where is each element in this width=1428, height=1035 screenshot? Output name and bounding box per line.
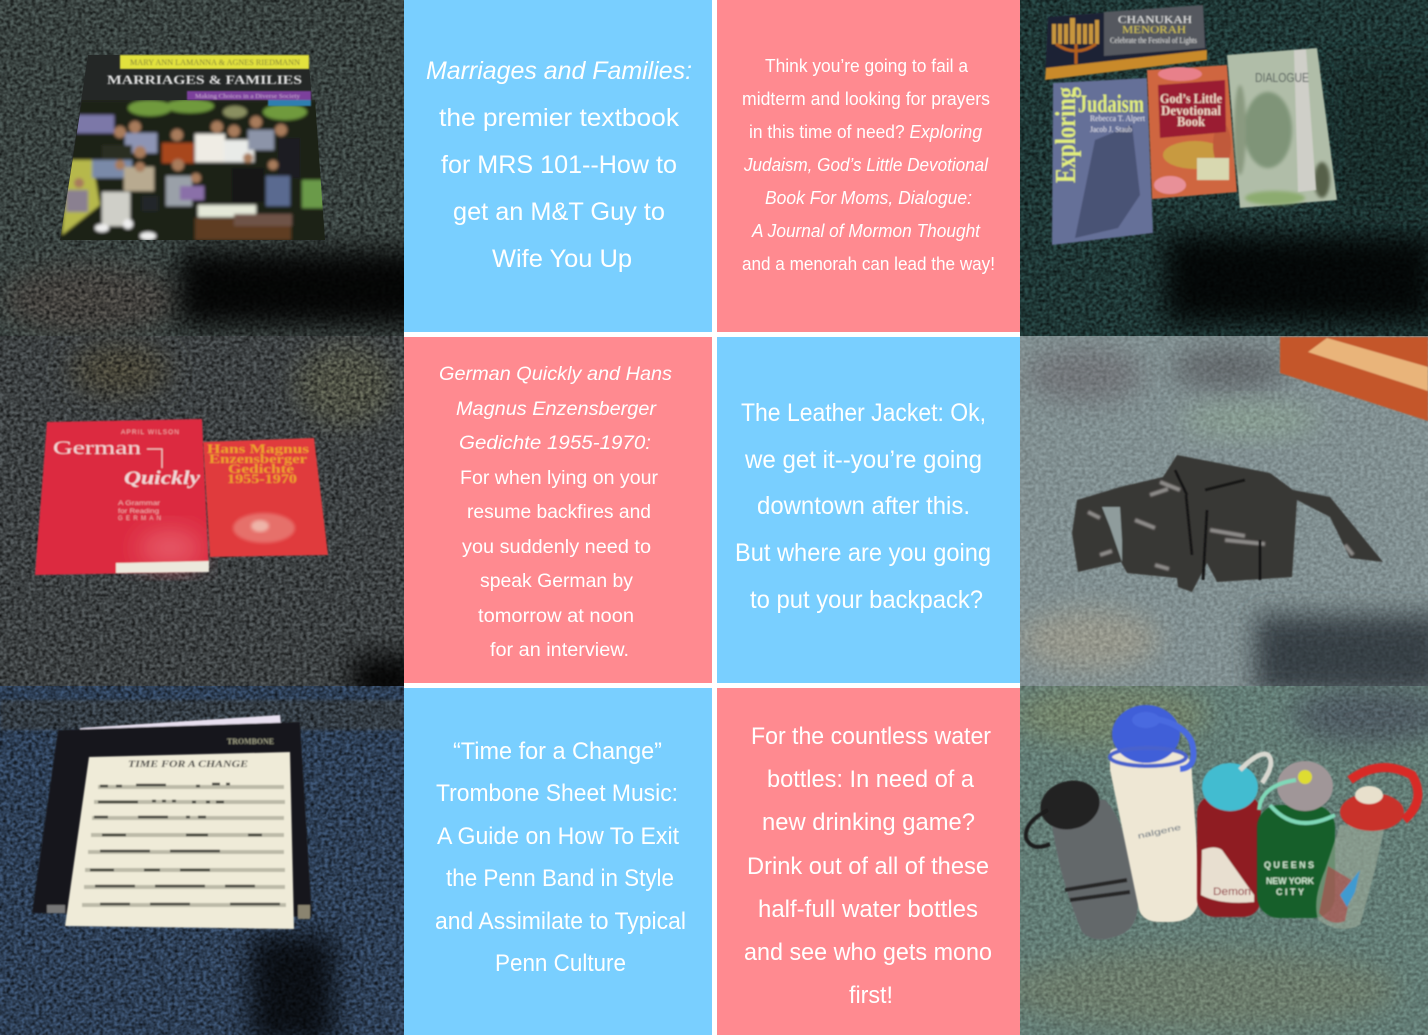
panel: water bottles text: For the countless water (751, 723, 991, 750)
green bottle: QUEENS (1264, 860, 1314, 870)
panel: prayers text: midterm and looking for prayers (742, 89, 990, 109)
sheet music page (65, 752, 294, 929)
panel: German books text: Magnus Enzensberger (456, 399, 657, 420)
panel: water bottles text: bottles: In need of a (767, 766, 975, 793)
purple subtitle strip: Making Choices in a Diverse Society (195, 93, 301, 100)
panel: water bottles text (717, 688, 1020, 1035)
panel: German books text: German Quickly and Hans (439, 364, 673, 385)
German Quickly book: German (53, 438, 142, 459)
wooden platform (1280, 337, 1428, 421)
panel: trombone music text: the Penn Band in Style (446, 865, 674, 892)
panel: trombone music text (404, 688, 712, 1035)
textbook cover (60, 55, 330, 245)
menorah box: CHANUKAH (1118, 14, 1192, 26)
panel: water bottles text: first! (849, 982, 893, 1009)
panel: German books text: Gedichte 1955-1970: (459, 433, 651, 454)
God's Little Devotional Book: Devotional (1161, 104, 1221, 119)
panel: water bottles text: and see who gets mono (744, 939, 992, 966)
panel: prayers text: Think you’re going to fail a (765, 56, 969, 76)
panel: trombone music text: A Guide on How To Exit (437, 823, 679, 850)
leather jacket (1072, 455, 1383, 592)
panel: trombone music text: and Assimilate to Typical (435, 908, 686, 935)
panel: leather jacket text: downtown after this. (757, 492, 970, 520)
Enzensberger Gedichte book: Hans Magnus (207, 441, 309, 456)
green bottle: NEW YORK (1266, 876, 1314, 886)
panel: Marriages and Families text: for MRS 101--How to (441, 151, 677, 179)
purple subtitle strip (187, 91, 311, 106)
yellow author strip (120, 55, 309, 69)
panel: Marriages and Families text: get an M&T Guy to (453, 198, 665, 226)
German Quickly book: GERMAN (118, 516, 161, 522)
panel: trombone music text: Penn Culture (495, 950, 626, 977)
menorah box: MENORAH (1122, 24, 1186, 36)
panel: Marriages and Families text: Wife You Up (492, 245, 632, 273)
panel: prayers text: Book For Moms, Dialogue: (765, 188, 972, 208)
Enzensberger Gedichte book (203, 438, 328, 557)
Exploring Judaism book (1051, 78, 1153, 245)
panel: German books text: For when lying on your (460, 468, 659, 489)
panel: water bottles text: Drink out of all of these (747, 853, 989, 880)
Enzensberger Gedichte book: Enzensberger (209, 451, 307, 466)
Enzensberger Gedichte book: 1955-1970 (227, 471, 297, 486)
menorah box (1045, 5, 1207, 80)
photo: religious books and menorah on carpet (1020, 0, 1428, 336)
Enzensberger Gedichte book: Gedichte (228, 461, 294, 476)
Exploring Judaism book: Rebecca T. Alpert (1090, 114, 1146, 123)
photo: leather jacket on carpet (1020, 336, 1428, 695)
panel: prayers text: Judaism, God’s Little Devotional (743, 155, 989, 175)
panel: German books text: speak German by (480, 571, 634, 592)
black binder (32, 715, 312, 919)
panel: water bottles text: half-full water bottles (758, 896, 978, 923)
God's Little Devotional Book: God’s Little (1160, 92, 1222, 107)
German Quickly book: Quickly (124, 468, 201, 489)
Exploring Judaism book: Exploring (1051, 87, 1082, 183)
Exploring Judaism book: Jacob J. Staub (1090, 125, 1132, 134)
sheet music page: TIME FOR A CHANGE (128, 760, 248, 770)
photo: water bottles on carpet (1000, 685, 1428, 1035)
panel: prayers text: in this time of need? Exploring (749, 122, 982, 142)
panel: German books text: tomorrow at noon (478, 606, 634, 627)
panel: trombone music text: “Time for a Change” (453, 738, 662, 765)
panel: leather jacket text: we get it--you’re going (744, 446, 982, 474)
green bottle: CITY (1276, 887, 1304, 897)
German Quickly book: A Grammar (118, 501, 160, 507)
panel: trombone music text: Trombone Sheet Music: (436, 780, 678, 807)
photo: trombone sheet music on carpet (0, 686, 404, 1035)
photo: Marriages and Families textbook on carpet (0, 0, 448, 336)
white Nalgene bottle: nalgene (1137, 823, 1183, 841)
panel: leather jacket text: But where are you going (735, 539, 991, 567)
photo: German books on carpet (0, 336, 422, 705)
white Nalgene bottle (1110, 705, 1200, 922)
panel: water bottles text: new drinking game? (762, 809, 975, 836)
God's Little Devotional Book: Book (1177, 115, 1205, 130)
panel: leather jacket text: The Leather Jacket: Ok, (741, 399, 986, 427)
German Quickly book: APRIL WILSON (121, 429, 179, 436)
Dialogue journal (1227, 48, 1337, 208)
panel: leather jacket text: to put your backpack? (750, 586, 983, 614)
panel: prayers text (717, 0, 1020, 332)
clear bottle with red cap (1316, 768, 1418, 929)
panel: Marriages and Families text (404, 0, 712, 332)
panel: Marriages and Families text: Marriages and Families: (426, 57, 692, 85)
Dialogue journal: DIALOGUE (1255, 70, 1309, 85)
red bottle (1197, 754, 1271, 917)
panel: prayers text: A Journal of Mormon Thought (751, 221, 981, 241)
panel: German books text (404, 337, 712, 683)
God's Little Devotional Book (1147, 65, 1237, 199)
panel: German books text: you suddenly need to (462, 537, 651, 558)
panel: Marriages and Families text: the premier textbook (439, 104, 680, 132)
panel: German books text: resume backfires and (467, 502, 651, 523)
panel: German books text: for an interview. (490, 640, 629, 661)
book title: MARRIAGES & FAMILIES (107, 73, 302, 87)
German Quickly book (35, 419, 209, 575)
grey bottle (1026, 774, 1138, 939)
yellow author strip: MARY ANN LAMANNA & AGNES RIEDMANN (130, 57, 300, 67)
panel: prayers text: and a menorah can lead the way! (742, 254, 995, 274)
green bottle (1257, 761, 1335, 918)
Exploring Judaism book: Judaism (1078, 91, 1144, 118)
menorah box: Celebrate the Festival of Lights (1110, 36, 1197, 45)
German Quickly book: for Reading (118, 509, 159, 515)
black binder: TROMBONE (227, 736, 274, 746)
red bottle: Demon (1213, 886, 1251, 898)
panel: leather jacket text (717, 337, 1020, 683)
